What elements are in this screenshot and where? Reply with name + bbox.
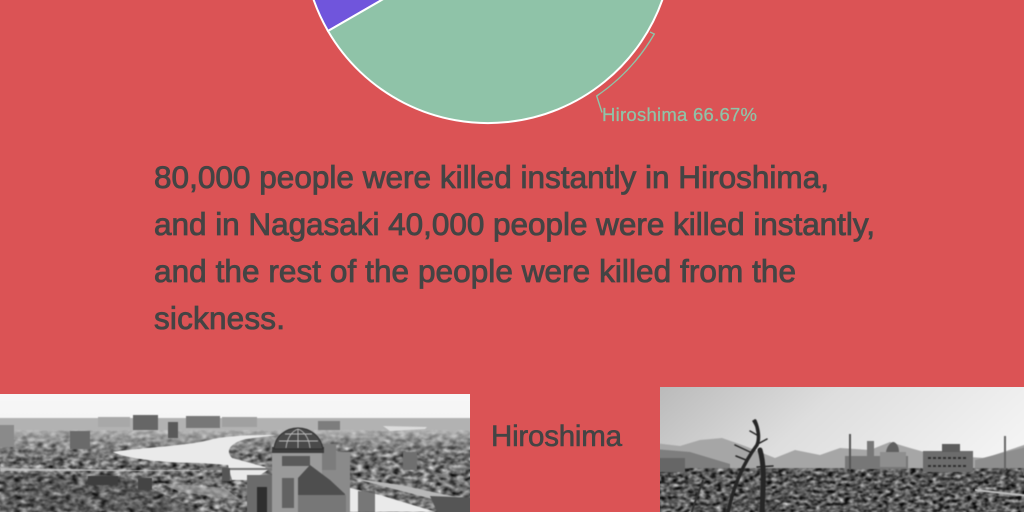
river	[113, 435, 277, 480]
bridge	[205, 468, 272, 470]
photo: Hiroshima wasteland with bare tree	[654, 381, 1024, 512]
body text: and the rest of the people were killed from the	[154, 253, 796, 289]
pie slice: Hiroshima	[328, 0, 664, 123]
ground rubble	[0, 430, 476, 512]
distant skyline	[0, 415, 476, 432]
body text	[154, 159, 875, 336]
pie chart	[312, 0, 757, 125]
dark foreground shade	[0, 472, 200, 512]
dome building	[247, 428, 350, 512]
distant buildings	[654, 434, 1006, 472]
bare tree	[727, 421, 773, 512]
mountains	[660, 438, 1024, 469]
ground rubble	[654, 468, 1024, 512]
body text: and in Nagasaki 40,000 people were killed instantly,	[154, 206, 875, 242]
ruined buildings	[0, 422, 417, 490]
body text: sickness.	[154, 300, 285, 336]
photo: Hiroshima dome ruins	[0, 388, 476, 512]
pie label: Hiroshima 66.67%	[602, 104, 757, 125]
leader bracket	[597, 32, 654, 112]
photo caption: Hiroshima	[491, 420, 623, 453]
body text: 80,000 people were killed instantly in Hiroshima,	[154, 159, 829, 195]
pie slice: other city	[312, 0, 390, 31]
